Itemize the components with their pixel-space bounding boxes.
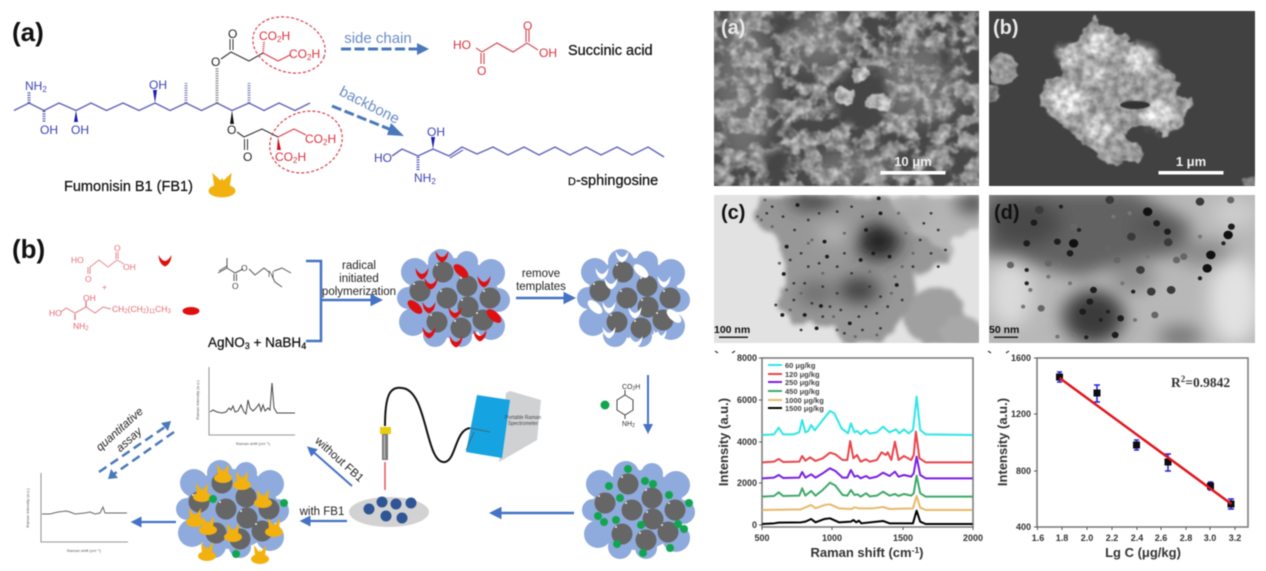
label: reagents: 3 [245, 341, 250, 351]
structure: fumonisin B1: H [281, 29, 290, 43]
axis ticks and numbers: 3.0 [1204, 533, 1216, 543]
x axis title: ) [919, 545, 924, 560]
arrow: with FB1 [304, 520, 347, 522]
label: D-sphingosine: D-sphingosine [568, 173, 658, 189]
y axis title: Intensity (a.u.) [716, 398, 731, 486]
structure: succinic acid [453, 19, 557, 78]
structure: template sphingosine: NH [73, 321, 85, 331]
structure: template succinic acid [71, 243, 136, 292]
structure: template sphingosine: 2 [143, 309, 147, 315]
label: quantitative assay: quantitative [94, 406, 146, 454]
structure: succinic acid: O [477, 64, 486, 78]
structure: fumonisin B1: 2 [307, 53, 312, 62]
structure: template sphingosine: 11 [149, 309, 156, 315]
arrow: composite to spectrum [135, 521, 176, 523]
label: reagents: 4 [301, 341, 306, 351]
arrow: backbone: backbone [336, 83, 402, 128]
x axis title: Raman shift (cm [810, 545, 912, 560]
structure: monomer: N [268, 269, 274, 279]
R squared annotation: R [1171, 375, 1181, 390]
chart: Raman spectrum without FB1: Raman shift (cm⁻¹) [236, 441, 271, 446]
axis ticks and numbers: 1200 [1011, 409, 1031, 419]
legend: 250 μg/kg [785, 378, 820, 387]
axis ticks and numbers [737, 353, 983, 543]
label: fumonisin B1: Fumonisin B1 (FB1) [64, 179, 193, 195]
icon: portable Raman spectrometer: Portable Raman [505, 415, 541, 421]
structure: fumonisin B1: H [311, 47, 320, 61]
label: radical initiated polymerization: initiated [339, 273, 379, 285]
axis ticks and numbers: 4000 [737, 437, 757, 447]
panel: synthesis and detection scheme (b) [12, 234, 695, 564]
axis ticks and numbers [1011, 353, 1241, 543]
structure: fumonisin B1: OH [71, 123, 89, 137]
axis ticks and numbers: 400 [1016, 522, 1031, 532]
structure: fumonisin B1: O [227, 123, 236, 137]
cluster: imprinted composite with templates [397, 249, 510, 348]
chart: Raman spectrum with FB1: Raman Intensity (a.u.) [25, 488, 30, 528]
arrow: bracket to polymerization [306, 261, 378, 341]
structure: 4-aminobenzoic acid: 2 [632, 423, 635, 429]
structure: D-sphingosine: 2 [431, 177, 436, 186]
structure: fumonisin B1: CO [289, 47, 307, 61]
structure: template sphingosine: HO [49, 308, 62, 318]
structure: fumonisin B1: O [243, 150, 252, 164]
structure: template succinic acid: HO [71, 255, 84, 265]
structure: fumonisin B1: CO [275, 150, 293, 164]
axis ticks and numbers: 6000 [737, 395, 757, 405]
axis ticks and numbers: 800 [1016, 466, 1031, 476]
axis ticks and numbers: 2.0 [1081, 533, 1093, 543]
y axis title: Intensity (a.u.) [995, 398, 1010, 486]
chart: calibration curve [995, 353, 1248, 560]
structure: template succinic acid: O [114, 243, 121, 253]
scale bar: 50 nm: 50 nm [989, 324, 1019, 336]
arrow: add reporter [647, 375, 649, 430]
x axis title: -1 [912, 545, 919, 555]
panel: molecular structures (a) [12, 8, 664, 197]
arrow: side chain [341, 30, 429, 55]
axis ticks and numbers: 1.8 [1056, 533, 1068, 543]
axis ticks and numbers: 3.2 [1229, 533, 1241, 543]
axis ticks and numbers: 2.8 [1180, 533, 1192, 543]
scale bar: 1 um [1158, 154, 1224, 174]
structure: fumonisin B1: O [228, 27, 237, 41]
icon: laser beam [384, 462, 386, 490]
structure: 4-aminobenzoic acid: NH [622, 421, 632, 428]
spectra curves [762, 397, 973, 524]
structure: template sphingosine: OH [83, 293, 96, 303]
heading: label c: (c) [721, 202, 745, 224]
structure: succinic acid: OH [539, 46, 557, 60]
chart: SERS spectra [716, 353, 983, 560]
legend: 450 μg/kg [785, 387, 820, 396]
label: radical initiated polymerization: polymerization [322, 286, 396, 298]
chart: Raman spectrum without FB1: Raman Intensity (a.u.) [195, 380, 200, 420]
panel: TEM image d [982, 190, 1260, 348]
legend: 60 μg/kg [785, 361, 816, 370]
structure: template sphingosine: ) [146, 304, 149, 314]
structure: fumonisin B1: O [211, 55, 220, 69]
structure: D-sphingosine [374, 125, 664, 186]
structure: D-sphingosine: NH [414, 171, 431, 185]
cluster: composite with bound FB1 [176, 460, 289, 564]
label: with FB1: with FB1 [299, 506, 344, 518]
structure: D-sphingosine: HO [374, 151, 392, 165]
structure: 4-aminobenzoic acid: H [635, 384, 640, 391]
structure: fumonisin B1: 2 [277, 35, 282, 44]
structure: succinic acid: HO [453, 38, 471, 52]
heading: label d: (d) [994, 202, 1020, 224]
icon: red ellipse template [182, 307, 200, 315]
chart: Raman spectrum without FB1 [195, 367, 295, 446]
structure: template sphingosine: 2 [124, 309, 128, 315]
structure: monomer: O [232, 281, 239, 291]
axis ticks and numbers: 1000 [822, 533, 842, 543]
axis ticks and numbers: 2.2 [1106, 533, 1118, 543]
axis ticks and numbers: 8000 [737, 353, 757, 363]
arrow: remove templates [516, 297, 571, 299]
structure: template sphingosine: CH [112, 304, 124, 314]
arrow: composite to substrate [494, 512, 574, 514]
structure: D-sphingosine: OH [427, 125, 445, 139]
structure: fumonisin B1: H [297, 150, 306, 164]
structure: template succinic acid: O [85, 274, 92, 284]
panel: SEM image a [714, 10, 979, 186]
panel: TEM image c [714, 193, 989, 350]
structure: 4-aminobenzoic acid: CO [622, 384, 632, 391]
label: reagents: + NaBH [250, 335, 301, 350]
structure: succinic acid: O [523, 19, 532, 33]
axis ticks and numbers: 1500 [893, 533, 913, 543]
label: remove templates: remove [522, 268, 560, 280]
axis ticks and numbers: 2000 [737, 478, 757, 488]
axis ticks and numbers: 1600 [1011, 353, 1031, 363]
legend [768, 361, 824, 413]
data points with error bars [1056, 372, 1234, 509]
scale bar: 10 um: 10 μm [894, 154, 932, 169]
panel: SEM image b [986, 11, 1258, 188]
structure: monomer: O [241, 263, 248, 273]
label: without FB1: without FB1 [312, 435, 366, 485]
icon: portable Raman spectrometer [466, 391, 541, 462]
icon: FB1 antibody marker [208, 173, 236, 197]
icon: sample plate with SERS spots [349, 497, 429, 527]
x axis title: Lg C (μg/kg) [1105, 545, 1181, 560]
axis ticks and numbers: 500 [754, 533, 770, 543]
legend: 1000 μg/kg [785, 396, 824, 405]
structure: template sphingosine: 2 [85, 326, 89, 332]
scale bar: 100 nm: 100 nm [714, 324, 750, 336]
arrow: quantitative assay dashed pair [99, 421, 174, 479]
structure: fumonisin B1: 2 [293, 156, 298, 165]
structure: fumonisin B1: H [327, 132, 336, 146]
structure: fumonisin B1: CO [259, 29, 277, 43]
chart: Raman spectrum with FB1: Raman shift (cm⁻¹) [67, 548, 102, 553]
structure: 4-aminobenzoic acid [617, 384, 640, 429]
structure: 4-aminobenzoic acid: 2 [632, 386, 636, 392]
label: remove templates: templates [516, 281, 566, 293]
structure: fumonisin B1: NH [25, 79, 42, 93]
structure: template sphingosine: (CH [128, 304, 143, 314]
R squared annotation: 2 [1181, 374, 1186, 384]
scale bar: 10 um [880, 154, 946, 174]
heading: panel b label: (b) [12, 234, 45, 264]
arrow: without FB1 [310, 449, 352, 486]
chart: Raman spectrum with FB1 [25, 473, 128, 553]
structure: fumonisin B1: 2 [42, 85, 47, 94]
structure: fumonisin B1: 2 [323, 138, 328, 147]
icon: portable Raman spectrometer: Spectrometer [508, 421, 538, 427]
icon: fiber cable [385, 388, 470, 462]
label: quantitative assay: assay [114, 425, 145, 455]
structure: template succinic acid: + [102, 282, 107, 292]
heading: panel a label: (a) [12, 17, 44, 47]
structure: monomer [218, 258, 291, 291]
icon: red cup template [158, 255, 172, 266]
axis ticks and numbers: 0 [752, 520, 757, 530]
structure: template sphingosine [49, 293, 171, 332]
heading: label a: (a) [721, 17, 745, 39]
cluster: composite with reporter [582, 461, 695, 559]
heading: label b: (b) [993, 17, 1019, 39]
icon: green reporter dot [600, 400, 610, 410]
legend: 120 μg/kg [785, 370, 820, 379]
structure: template sphingosine: CH [155, 304, 167, 314]
scale bar: 1 um: 1 μm [1176, 154, 1206, 169]
fit line [1060, 378, 1231, 504]
decorative crevice [1120, 101, 1150, 109]
axis ticks and numbers: 2.4 [1131, 533, 1143, 543]
label: succinic acid: Succinic acid [568, 43, 653, 59]
icon: Raman probe [380, 427, 391, 460]
label: radical initiated polymerization: radical [342, 260, 376, 272]
structure: fumonisin B1: OH [149, 78, 167, 92]
arrow: side chain: side chain [344, 30, 412, 47]
structure: template sphingosine: 3 [167, 309, 171, 315]
R squared annotation: =0.9842 [1185, 375, 1230, 390]
axis ticks and numbers: 2.6 [1155, 533, 1167, 543]
structure: template succinic acid: OH [123, 262, 136, 272]
structure: fumonisin B1: CO [305, 132, 323, 146]
axis ticks and numbers: 2000 [963, 533, 983, 543]
legend: 1500 μg/kg [785, 404, 824, 413]
axis ticks and numbers: 1.6 [1032, 533, 1044, 543]
label: reagents: AgNO [208, 335, 245, 350]
structure: fumonisin B1: OH [40, 123, 58, 137]
cluster: imprinted composite with cavities [577, 249, 690, 348]
structure: fumonisin B1 [14, 8, 351, 183]
